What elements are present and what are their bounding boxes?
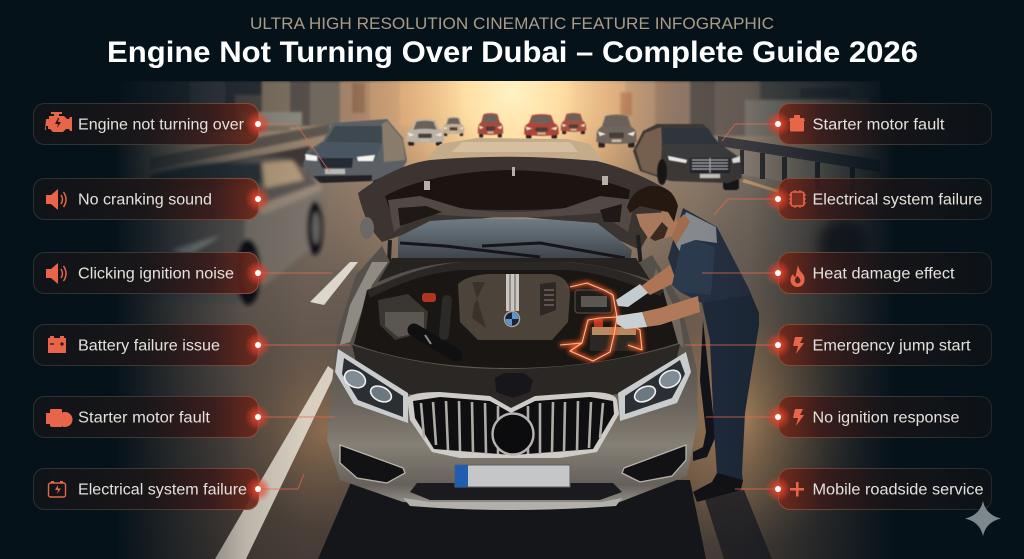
- windshield: [398, 218, 632, 262]
- pill: clicking ignition noise: Clicking ignition noise: [78, 266, 234, 282]
- pill: no ignition response: No ignition response: [812, 410, 960, 426]
- engine bay: [354, 262, 678, 368]
- car: [327, 157, 698, 510]
- upper bay panel: [378, 258, 650, 282]
- boot: [693, 473, 743, 502]
- lower glove: [616, 312, 647, 329]
- chrome splitter: [403, 498, 622, 510]
- subtitle: ULTRA HIGH RESOLUTION CINEMATIC FEATURE INFOGRAPHIC: [250, 14, 774, 33]
- cowl trim: [367, 262, 664, 298]
- pill: heat damage effect: [778, 252, 992, 294]
- right panel: causes and services: [778, 104, 992, 510]
- pill: no ignition response: [778, 396, 992, 438]
- icon: battery outline with bolt: [48, 481, 66, 497]
- pill: emergency jump start: Emergency jump start: [812, 338, 971, 354]
- sedan roof behind the hood: [425, 138, 603, 172]
- pill: battery failure issue: Battery failure issue: [78, 338, 220, 354]
- left panel: symptoms: [34, 104, 258, 510]
- Mercedes sedan behind: [633, 124, 742, 190]
- dark ghost car on the right: [818, 219, 868, 271]
- pill: no cranking sound: No cranking sound: [78, 192, 212, 208]
- connector lines: [259, 124, 778, 489]
- icon: chip: [789, 190, 806, 208]
- face: [636, 212, 678, 240]
- fenders and body side: [327, 246, 698, 510]
- pill: electrical system failure: [34, 468, 258, 510]
- icon: speaker: [46, 263, 66, 284]
- grille: [407, 392, 619, 458]
- pill: electrical system failure: [778, 178, 992, 220]
- hood struts: [388, 235, 642, 280]
- icon: starter: [789, 115, 805, 132]
- pill: heat damage effect: Heat damage effect: [812, 266, 955, 282]
- air box and intake hose: [378, 293, 456, 355]
- pill: mobile roadside service: [778, 468, 992, 510]
- title: Engine Not Turning Over Dubai – Complete Guide 2026: [107, 36, 918, 69]
- engine cover: [458, 274, 570, 340]
- lower grille: [410, 483, 622, 500]
- shirt: [668, 208, 750, 303]
- pill: starter motor fault: Starter motor fault: [812, 116, 945, 134]
- blurred passing car on the left: [120, 156, 323, 305]
- sun glow at horizon: [340, 81, 684, 171]
- icon: sparkle watermark: [965, 501, 1001, 536]
- pill: clicking ignition noise: [34, 252, 258, 294]
- electric arcs: [560, 283, 642, 361]
- upper glove: [616, 284, 648, 307]
- near leg and trousers: [702, 287, 759, 482]
- upper forearm: [640, 262, 680, 295]
- lower left intake: [340, 445, 405, 483]
- hood latch: [495, 373, 533, 398]
- ground shadow beneath car: [318, 480, 706, 559]
- left guard rail: [150, 112, 330, 196]
- BMW SUV behind: [303, 119, 407, 183]
- grey shoulder panel: [676, 212, 717, 252]
- mechanic shadow: [704, 490, 772, 559]
- icon: lightning bolt: [793, 409, 804, 426]
- pill: electrical system failure: Electrical system failure: [812, 192, 982, 208]
- beard: [650, 222, 668, 241]
- icon: plus: [790, 482, 804, 496]
- icon: battery: [48, 336, 66, 353]
- pill: engine not turning over: Engine not turning over: [78, 116, 244, 134]
- right side fade into background: [700, 81, 1024, 559]
- pill: starter motor fault: Starter motor fault: [78, 410, 211, 426]
- icon: flame: [790, 265, 805, 287]
- distant traffic: [406, 113, 637, 148]
- license plate: [455, 465, 570, 487]
- fuse box: [575, 290, 612, 313]
- short sleeve: [672, 240, 715, 295]
- lower right intake: [622, 445, 686, 482]
- right guard rail: [718, 136, 880, 197]
- lower forearm: [642, 296, 700, 327]
- pill: no cranking sound: [34, 178, 258, 220]
- hair: [627, 186, 678, 222]
- icon: engine warning: [45, 112, 72, 132]
- connector nodes: [245, 111, 791, 502]
- pill: mobile roadside service: Mobile roadside service: [812, 482, 984, 498]
- far leg: [693, 320, 717, 461]
- left headlight: [335, 349, 408, 423]
- icon: lightning bolt: [793, 337, 804, 354]
- neck: [668, 214, 690, 245]
- open hood: [358, 157, 672, 250]
- icon: starter motor: [46, 409, 72, 427]
- car battery: [590, 319, 638, 351]
- warm light on the road: [225, 110, 900, 559]
- lane markings: [215, 179, 782, 559]
- wipers: [400, 243, 625, 258]
- front support panel: [352, 344, 680, 408]
- mechanic: [616, 186, 759, 502]
- mirror: [360, 217, 374, 239]
- pill: electrical system failure: Electrical system failure: [78, 482, 247, 498]
- pill: battery failure issue: [34, 324, 258, 366]
- pill: starter motor fault: [778, 104, 992, 144]
- skyline buildings: [120, 81, 880, 136]
- pill: starter motor fault: [34, 396, 258, 438]
- right headlight: [618, 352, 691, 421]
- icon: speaker: [46, 189, 66, 210]
- roof panel: [452, 142, 578, 152]
- road surface: [0, 120, 1024, 559]
- top band above photo: [0, 0, 1024, 81]
- pill: emergency jump start: [778, 324, 992, 366]
- pill: engine not turning over: [34, 104, 258, 144]
- left side fade into background: [0, 81, 340, 559]
